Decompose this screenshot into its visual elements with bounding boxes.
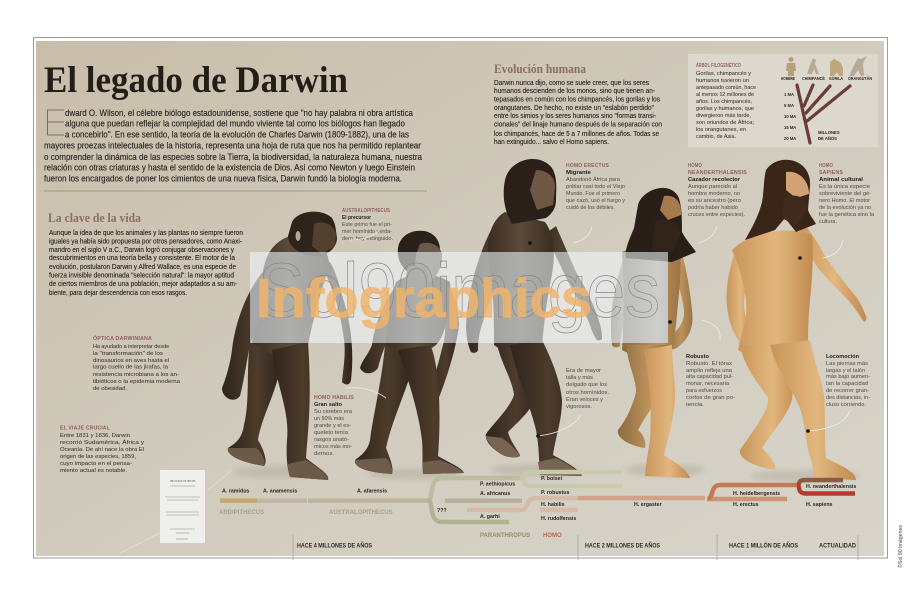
captions: el viaje crucial: cuyo impacto en el pensa- — [60, 461, 132, 467]
captions: erectus talla: otros homínidos. — [566, 390, 609, 396]
text block: introduction: a concebirlo". En ese sentido, la teoría de la evolución de Charles Darwin (1809-1882), una de las — [65, 130, 410, 140]
captions: robusto: monar, necesaria — [686, 381, 730, 387]
captions: robusto — [686, 354, 735, 408]
captions: locomoción: de recorrer gran- — [826, 388, 869, 394]
captions: homo habilis: micos más mo- — [314, 444, 352, 450]
captions: el viaje crucial: origen de las especies, 1859, — [60, 454, 136, 460]
captions: australopithecus: AUSTRALOPITHECUS — [342, 208, 390, 214]
section: evolución humana: Evolución humana — [494, 61, 586, 76]
captions: homo sapiens: SAPIENS — [819, 170, 843, 176]
panel: árbol filogenético: humanos tuvieron un — [696, 78, 749, 84]
figure: homo sapiens — [727, 160, 866, 480]
credit: ©Sol 90 Imágenes — [897, 524, 904, 568]
text block: introduction: relación con otras criaturas y hasta el sentido de la existencia de Dios. Así como Newton y luego Einstein — [44, 162, 415, 172]
section: la clave de la vida: de ciertos miembros de una población, mejor adaptados a su am- — [49, 279, 237, 288]
panel: árbol filogenético: MILLONES — [818, 130, 840, 135]
section: la clave de la vida: biente, para dejar descendencia con esos rasgos. — [49, 288, 187, 297]
panel: árbol filogenético: 1 MA — [784, 92, 794, 97]
panel: árbol filogenético: CHIMPANCÉ — [802, 76, 825, 81]
captions: óptica darwiniana: ÓPTICA DARWINIANA — [93, 334, 152, 342]
panel: árbol filogenético: DE AÑOS — [818, 136, 837, 141]
timeline: labels: H. rudolfensis — [541, 516, 576, 522]
panel: árbol filogenético: ÁRBOL FILOGENÉTICO — [696, 61, 741, 69]
timeline: labels: H. erectus — [733, 502, 759, 508]
captions: homo sapiens: sobreviviente del gé- — [819, 191, 871, 197]
icon: orangután — [849, 56, 867, 76]
captions: locomoción: Las piernas más — [826, 361, 868, 367]
captions: óptica darwiniana — [93, 334, 181, 392]
captions: locomoción: Locomoción — [826, 354, 859, 360]
captions: homo sapiens: cultura. — [819, 219, 837, 225]
panel: árbol filogenético: los orangutanes, en — [696, 127, 746, 133]
captions: homo habilis: rasgos anató- — [314, 437, 349, 443]
text block: introduction: dward O. Wilson, el célebre biólogo estadounidense, sostiene que "no hay palabra ni obra artística — [65, 108, 413, 118]
figure: ardipithecus — [222, 212, 352, 480]
captions: el viaje crucial: Entre 1831 y 1836, Darwin — [60, 433, 130, 439]
captions: homo habilis: un 50% más — [314, 416, 344, 422]
captions: óptica darwiniana: dinosaurios en aves hasta el — [93, 358, 169, 364]
captions: homo habilis: dernos. — [314, 451, 334, 457]
captions: homo erectus: que cazó, usó el fuego y — [566, 198, 625, 204]
panel: árbol filogenético: ORANGUTÁN — [848, 76, 872, 81]
section: evolución humana: orangutanes. De hecho, no existe un "eslabón perdido" — [494, 103, 654, 112]
captions: homo neanderthalensis: cruces entre especies). — [688, 212, 745, 218]
captions: homo neanderthalensis: Aunque parecido al — [688, 184, 737, 190]
captions: el viaje crucial: Oceanía. De ahí nace la obra El — [60, 447, 144, 453]
captions: australopithecus: Este primo fue el pri- — [342, 222, 392, 228]
captions: homo erectus: Abandonó África para — [566, 176, 621, 183]
section: la clave de la vida: descubrimientos en una teoría bella y consistente. El motor de la — [49, 253, 236, 262]
captions: óptica darwiniana: la "transformación" de los — [93, 351, 163, 357]
captions: locomoción: des distancias, in- — [826, 395, 870, 401]
captions: óptica darwiniana: Ha ayudado a interpretar desde — [93, 344, 170, 350]
panel: árbol filogenético: gorilas y humanos, que — [696, 106, 755, 112]
book cover: the origin of species: THE ORIGIN OF SPECIES — [170, 479, 196, 483]
captions: robusto: para esfuerzos — [686, 388, 722, 394]
section: la clave de la vida: Aunque la idea de que los animales y las plantas no siempre fueron — [49, 228, 243, 237]
timeline: labels — [219, 476, 856, 539]
captions: homo habilis: Gran salto — [314, 402, 342, 408]
figure: homo erectus — [466, 159, 602, 476]
panel: árbol filogenético: Gorilas, chimpancés y — [696, 71, 751, 77]
section: evolución humana: entre los simios y los seres humanos sino "formas transi- — [494, 111, 656, 120]
captions: óptica darwiniana: tibióticos o la epidemia moderna — [93, 379, 181, 385]
text block: introduction: o comprender la dinámica de las especies sobre la Tierra, la biodiversidad, la naturaleza humana, nuestra — [44, 152, 422, 162]
timeline: labels: P. aethiopicus — [480, 482, 515, 488]
icon: hombre — [786, 57, 796, 76]
timeline: time axis: HACE 4 MILLONES DE AÑOS — [297, 542, 372, 550]
section: la clave de la vida: iguales ya había sido propuesta por otros pensadores, como Anaxi- — [49, 236, 242, 246]
captions: homo sapiens: HOMO — [819, 163, 833, 169]
title: El legado de Darwin — [44, 60, 348, 101]
section: evolución humana: han extinguido... salvo el Homo sapiens. — [494, 137, 609, 146]
captions: homo neanderthalensis: NEANDERTHALENSIS — [688, 170, 747, 176]
captions: locomoción: largas y el talón — [826, 368, 865, 374]
timeline: labels: H. ergaster — [634, 502, 662, 508]
timeline: time axis: HACE 1 MILLÓN DE AÑOS — [729, 542, 798, 550]
captions: homo sapiens: nero Homo. El motor — [819, 198, 870, 204]
timeline: time axis — [293, 535, 858, 560]
captions: erectus talla: talla y más — [566, 375, 593, 381]
panel: árbol filogenético: antepasado común, hace — [696, 85, 757, 91]
watermark text: Sol90images — [258, 248, 660, 334]
panel: árbol filogenético: 5 MA — [784, 103, 794, 108]
panel: árbol filogenético: cambio, de Asia. — [696, 134, 736, 140]
section: evolución humana: los chimpancés, hace de 5 a 7 millones de años. Todas se — [494, 129, 659, 138]
timeline: labels: H. neanderthalensis — [806, 484, 856, 490]
panel: árbol filogenético: GORILA — [829, 76, 843, 81]
captions: locomoción: cluso corriendo. — [826, 402, 866, 408]
captions: erectus talla: Eran veloces y — [566, 397, 603, 403]
captions: locomoción: tan la capacidad — [826, 381, 868, 387]
timeline: labels: H. sapiens — [806, 502, 833, 508]
captions: locomoción: más bajo aumen- — [826, 374, 870, 380]
watermark band — [250, 252, 668, 343]
captions: locomoción — [826, 354, 870, 408]
captions: robusto: tencia. — [686, 402, 704, 408]
captions: homo sapiens: de la evolución ya no — [819, 205, 872, 211]
captions: homo neanderthalensis: Cazador recolector — [688, 177, 741, 183]
captions: homo sapiens — [819, 163, 875, 225]
captions: homo habilis — [314, 395, 354, 457]
section: la clave de la vida: fuerza invisible denominada "selección natural": la mayor aptitud — [49, 270, 234, 280]
book cover: the origin of species — [160, 470, 205, 543]
figure: homo neanderthalensis — [611, 188, 696, 478]
watermark text: Infographics — [256, 267, 592, 329]
text block: introduction: alguna que puedan reflejar la complejidad del mundo viviente tal como los biólogos han llegado — [65, 118, 405, 128]
timeline: time axis: ACTUALIDAD — [819, 544, 857, 550]
figure shadows — [233, 464, 860, 482]
captions: óptica darwiniana: largo cuello de las jirafas, la — [93, 364, 169, 370]
section: evolución humana: tepasados en común con los chimpancés, los gorilas y los — [494, 94, 660, 104]
timeline: labels: ARDIPITHECUS — [219, 510, 264, 516]
captions: homo neanderthalensis: hombre moderno, no — [688, 191, 741, 197]
text block: introduction: fueron los encargados de poner los cimientos de una nueva física, Darwin fundó la biología moderna. — [44, 174, 402, 184]
panel: árbol filogenético — [688, 54, 878, 147]
timeline: labels: A. anamensis — [263, 488, 297, 494]
captions: australopithecus: El precursor — [342, 215, 372, 221]
captions: el viaje crucial: miento actual es notable. — [60, 468, 127, 474]
timeline: labels: P. boisei — [541, 476, 563, 482]
panel: árbol filogenético: al menos 12 millones de — [696, 92, 755, 98]
section: la clave de la vida: La clave de la vida — [48, 210, 141, 225]
icon: gorila — [830, 59, 843, 76]
section: evolución humana — [494, 61, 662, 146]
icon: chimpancé — [807, 58, 819, 74]
section: evolución humana: Darwin nunca dijo, como se suele creer, que los seres — [494, 78, 649, 87]
panel: árbol filogenético: HOMBRE — [781, 76, 795, 81]
section: la clave de la vida — [48, 210, 243, 297]
captions: homo sapiens: fue la genética sino la — [819, 212, 875, 218]
figure: homo habilis — [355, 231, 464, 474]
captions: homo habilis: grande y el es- — [314, 423, 351, 429]
captions: homo erectus — [566, 163, 626, 211]
timeline: labels: A. garhi — [480, 514, 500, 520]
captions: erectus talla: delgado que los — [566, 382, 607, 388]
panel: árbol filogenético: divergieron más tarde, — [696, 113, 751, 119]
timeline: time axis: HACE 2 MILLONES DE AÑOS — [585, 542, 660, 550]
captions: australopithecus: mer homínido verda- — [342, 229, 392, 235]
captions: robusto: Robusto. El tórax — [686, 361, 732, 367]
timeline: labels: A. africanus — [480, 491, 510, 497]
captions: óptica darwiniana: de obesidad. — [93, 386, 127, 392]
timeline: labels: AUSTRALOPITHECUS — [329, 510, 393, 516]
timeline: labels: P. robustus — [541, 490, 570, 496]
captions: robusto: cortos de gran po- — [686, 395, 735, 401]
callout lines — [345, 227, 850, 436]
captions: homo neanderthalensis — [688, 163, 747, 218]
timeline: labels: H. habilis — [541, 502, 565, 508]
captions: homo neanderthalensis: podría haber habido — [688, 205, 739, 211]
captions: homo erectus: cuidó de los débiles. — [566, 205, 615, 211]
panel: árbol filogenético: años. Los chimpancés, — [696, 99, 752, 105]
captions: el viaje crucial: recorrió Sudamérica, África y — [60, 439, 144, 446]
captions: homo habilis: Su cerebro era — [314, 409, 353, 415]
captions: robusto: alta capacidad pul- — [686, 374, 733, 380]
timeline: labels: ??? — [437, 508, 447, 514]
captions: erectus talla — [566, 368, 609, 410]
timeline: labels: HOMO — [543, 533, 562, 539]
section: la clave de la vida: mandro en el siglo V a.C., Darwin logró conjugar observaciones y — [49, 245, 234, 254]
captions: el viaje crucial — [60, 426, 144, 474]
captions: homo habilis: HOMO HABILIS — [314, 395, 354, 401]
captions: homo neanderthalensis: es su ancestro (pero — [688, 198, 742, 204]
captions: robusto: amplio refleja una — [686, 368, 733, 374]
panel: árbol filogenético: 10 MA — [784, 114, 796, 119]
captions: homo sapiens: Animal cultural — [819, 177, 863, 183]
panel: árbol filogenético: son oriundos de África; — [696, 119, 754, 126]
section: evolución humana: cionales" del linaje humano después de la separación con — [494, 120, 662, 128]
timeline: labels: A. afarensis — [357, 488, 387, 494]
captions: homo erectus: HOMO ERECTUS — [566, 163, 609, 169]
captions: el viaje crucial: EL VIAJE CRUCIAL — [60, 426, 110, 432]
section: evolución humana: humanos descienden de los monos, sino que tienen an- — [494, 86, 655, 95]
captions: homo neanderthalensis: HOMO — [688, 163, 702, 169]
captions: homo erectus: Mundo. Fue el primero — [566, 191, 621, 197]
panel: árbol filogenético: 15 MA — [784, 125, 796, 130]
captions: australopithecus: dero, hoy extinguido. — [342, 236, 393, 242]
captions: homo erectus: Migrante — [566, 170, 592, 176]
captions: erectus talla: Era de mayor — [566, 368, 601, 374]
captions: homo habilis: queleto tenía — [314, 430, 349, 436]
captions: robusto: Robusto — [686, 354, 709, 360]
timeline: evolutionary branches — [220, 472, 855, 522]
captions: australopithecus — [342, 208, 393, 242]
timeline: labels: PARANTHROPUS — [480, 533, 530, 539]
captions: homo sapiens: Es la única especie — [819, 184, 871, 190]
text block: introduction: mayores proezas intelectuales de la historia, representa una hoja de ruta que nos ha permitido replantear — [44, 140, 421, 150]
captions: óptica darwiniana: resistencia microbiana a los an- — [93, 372, 179, 378]
chart: árbol de divergencia — [797, 85, 850, 143]
captions: erectus talla: vigorosos. — [566, 404, 592, 410]
section: la clave de la vida: evolución, postularon Darwin y Alfred Wallace, es una especie de — [49, 262, 236, 271]
text block: introduction — [44, 108, 422, 184]
captions: homo erectus: poblar casi todo el Viejo — [566, 184, 626, 190]
panel: árbol filogenético: 20 MA — [784, 136, 796, 141]
timeline: labels: A. ramidus — [222, 488, 249, 494]
timeline: labels: H. heidelbergensis — [733, 491, 780, 497]
